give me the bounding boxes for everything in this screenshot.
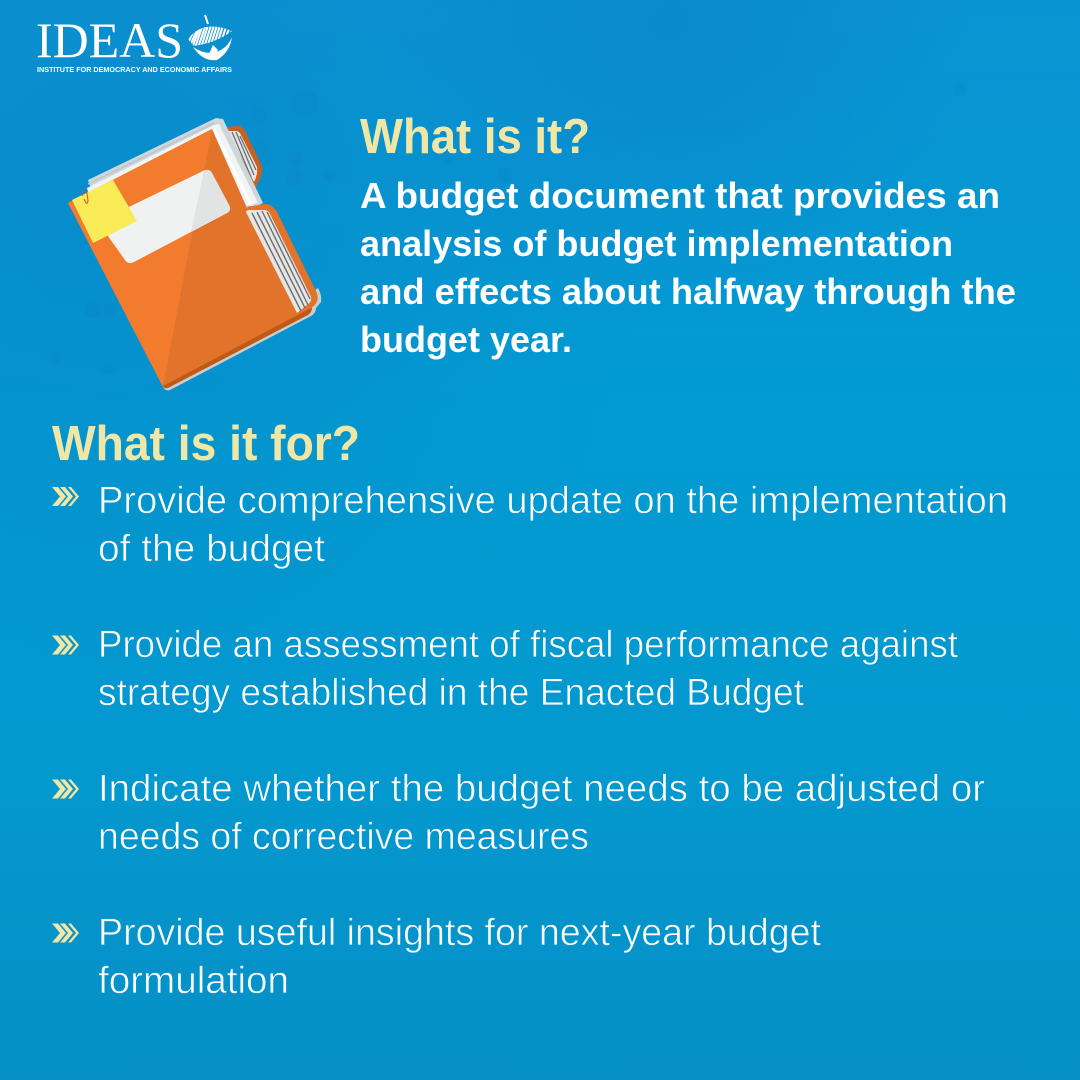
list item 4 <box>52 912 821 1002</box>
logo tagline: INSTITUTE FOR DEMOCRACY AND ECONOMIC AFFAIRS <box>37 65 232 74</box>
white label <box>98 170 230 263</box>
list item 2: strategy established in the Enacted Budget <box>98 672 804 714</box>
folder shadow <box>162 288 321 390</box>
logo wordmark: IDEAS <box>36 12 183 68</box>
definition text block <box>360 175 1016 360</box>
folder light half <box>68 129 212 386</box>
list item 4: formulation <box>98 960 289 1002</box>
list item 3: Indicate whether the budget needs to be adjusted or <box>98 768 985 810</box>
list item 4: Provide useful insights for next-year budget <box>98 912 821 954</box>
list item 2: Provide an assessment of fiscal performance against <box>98 624 958 666</box>
definition text block: analysis of budget implementation <box>360 223 953 264</box>
list item 1: of the budget <box>98 528 325 570</box>
logo: IDEAS <box>36 12 233 74</box>
heading: What is it for?: What is it for? <box>52 417 360 471</box>
paper sheets <box>88 118 263 215</box>
icon: chevrons <box>52 636 79 654</box>
back tab <box>226 126 262 191</box>
icon: chevrons <box>52 924 79 942</box>
icon: logo bird <box>186 15 233 60</box>
definition text block: and effects about halfway through the <box>360 271 1016 312</box>
list item 3: needs of corrective measures <box>98 816 589 858</box>
list item 1 <box>52 480 1008 570</box>
icon: chevrons <box>52 487 79 506</box>
icon: orange folder <box>68 118 321 390</box>
sticky note <box>72 180 137 243</box>
list item 3 <box>52 768 985 858</box>
definition text block: A budget document that provides an <box>360 175 1000 216</box>
paper clip <box>82 191 88 203</box>
right tab strip <box>246 210 311 313</box>
list item 1: Provide comprehensive update on the implementation <box>98 480 1008 522</box>
heading: What is it?: What is it? <box>360 110 590 164</box>
list item 2 <box>52 624 958 714</box>
definition text block: budget year. <box>360 319 572 360</box>
folder front <box>68 129 318 386</box>
icon: chevrons <box>52 780 79 798</box>
folder back edge <box>162 300 312 388</box>
